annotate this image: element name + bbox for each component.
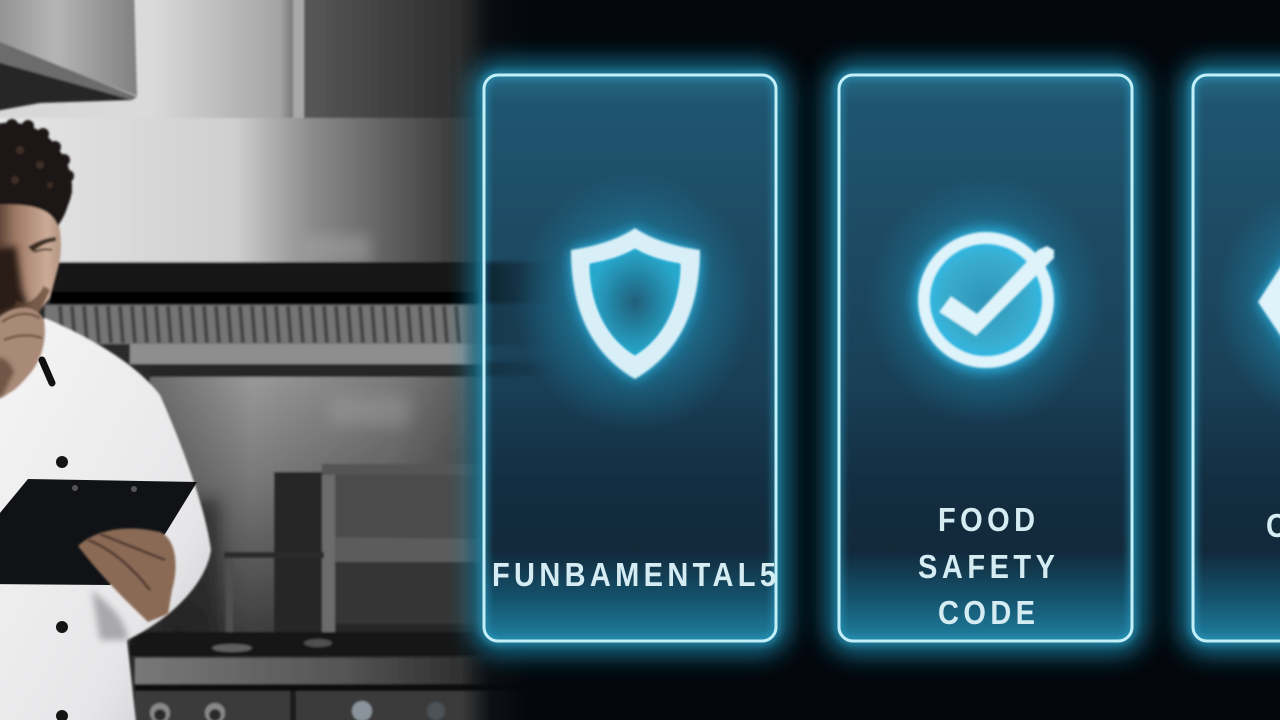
card glow [484, 75, 776, 641]
label: food safety code: CODE [938, 594, 1035, 631]
panel: grayscale kitchen background [0, 0, 580, 720]
panel: chef figure [0, 119, 211, 720]
icon: shield [515, 172, 755, 432]
card glow [1193, 75, 1280, 641]
kitchen ghost showing through [486, 262, 558, 376]
chef hand at chin [0, 308, 45, 402]
clipboard [0, 479, 197, 585]
panel: card fundamentals [484, 75, 776, 641]
panel: third card, cropped [1193, 75, 1280, 641]
pen [42, 360, 52, 383]
card glow [839, 75, 1132, 641]
fade from kitchen into dark [462, 0, 532, 720]
icon: check circle [866, 175, 1106, 425]
chef coat [0, 318, 211, 720]
label: food safety code: FOOD [938, 501, 1035, 538]
shelving unit [224, 464, 480, 641]
label: food safety code: SAFETY [918, 548, 1055, 585]
chef head [0, 119, 74, 318]
range hood [0, 0, 137, 112]
hand holding clipboard [78, 528, 176, 622]
panel: card food safety code [839, 75, 1132, 641]
icon: diamond, cropped [1215, 182, 1280, 422]
label: fundamentals: FUNBAMENTAL5 [492, 556, 776, 593]
label: food safety code [918, 501, 1055, 631]
coat buttons [56, 456, 68, 720]
